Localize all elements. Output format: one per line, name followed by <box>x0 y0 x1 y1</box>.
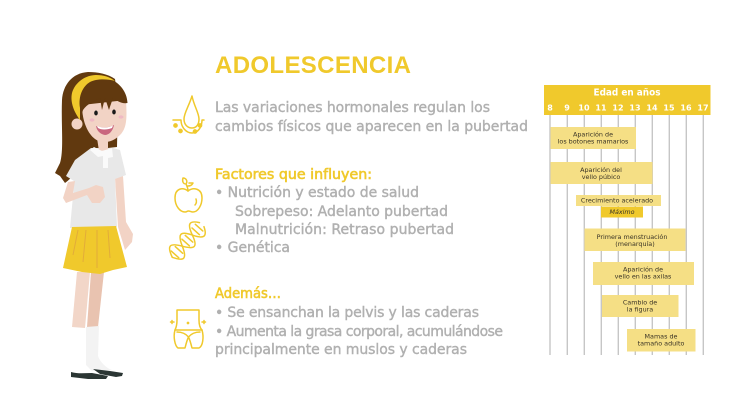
bar: armpit hair: Aparición de <box>623 266 663 274</box>
collar <box>90 147 113 168</box>
bar: growth spurt: Crecimiento acelerado <box>581 196 653 204</box>
right arm <box>115 176 133 250</box>
skirt <box>63 226 127 274</box>
skirt pleats <box>73 230 110 268</box>
title: ADOLESCENCIA <box>215 52 411 79</box>
list: factors: Sobrepeso: Adelanto pubertad <box>235 204 448 220</box>
bar: body shape: la figura <box>627 306 653 314</box>
list: additional changes: principalmente en muslos y caderas <box>215 342 467 358</box>
list: additional changes: • Se ensanchan la pelvis y las caderas <box>215 305 479 321</box>
list: additional changes: • Aumenta la grasa corporal, acumulándose <box>215 324 503 340</box>
chart header: 13 <box>629 104 641 112</box>
chart header: 12 <box>612 104 624 112</box>
left arm and hand <box>63 181 105 203</box>
bar: pubic hair: vello púbico <box>582 173 620 181</box>
chart header: 16 <box>680 104 692 112</box>
icon: hair follicle <box>173 96 204 133</box>
chart header: 14 <box>646 104 658 112</box>
eyes <box>94 110 116 116</box>
icon: DNA helix <box>165 218 209 264</box>
chart header: Edad en años <box>594 88 661 98</box>
text: hormonal variations: Las variaciones hormonales regulan los <box>215 100 490 116</box>
fringe <box>78 78 128 120</box>
sock <box>86 326 112 371</box>
cheeks <box>90 115 124 122</box>
neck <box>97 138 108 151</box>
bar: armpit hair <box>593 262 694 285</box>
bar: breast buds: Aparición de <box>573 130 613 138</box>
icon: waist and hips <box>170 310 206 348</box>
bar: body shape: Cambio de <box>623 298 657 306</box>
text: hormonal variations <box>215 100 528 135</box>
hair back <box>55 72 118 183</box>
chart header: 17 <box>697 104 709 112</box>
icon: apple <box>175 178 202 212</box>
ear <box>72 118 82 130</box>
list: factors <box>215 185 454 256</box>
headband <box>71 75 115 120</box>
bar: peak <box>601 206 643 218</box>
bar: breast buds: los botones mamarios <box>558 138 629 146</box>
legs <box>72 272 104 328</box>
bar: adult breast size: tamaño adulto <box>638 340 684 348</box>
heading: furthermore: Además… <box>215 286 281 302</box>
chart header: 11 <box>595 104 607 112</box>
bar: first menstruation <box>584 228 686 251</box>
bar: armpit hair: vello en las axilas <box>615 272 672 280</box>
chart header: 15 <box>663 104 675 112</box>
bar: growth spurt <box>576 195 661 206</box>
bar: adult breast size <box>627 329 696 352</box>
teeth <box>97 126 113 130</box>
chart header <box>544 85 710 115</box>
shoes <box>71 369 123 379</box>
text: hormonal variations: cambios físicos que aparecen en la pubertad <box>215 119 528 135</box>
bar: breast buds <box>550 127 636 149</box>
chart grid lines <box>550 115 703 355</box>
list: factors: Malnutrición: Retraso pubertad <box>235 222 454 238</box>
mouth <box>96 125 114 135</box>
bar: body shape <box>602 295 678 317</box>
chart header: 10 <box>578 104 590 112</box>
shirt <box>66 148 126 228</box>
bar: first menstruation: (menarquía) <box>615 240 655 248</box>
bar: first menstruation: Primera menstruación <box>597 233 667 241</box>
chart header: 8 <box>547 104 553 112</box>
bar: adult breast size: Mamas de <box>645 332 678 340</box>
chart header: 9 <box>564 104 570 112</box>
illustration: teenage girl <box>55 72 133 379</box>
heading: influencing factors: Factores que influyen: <box>215 167 372 183</box>
face <box>82 100 126 142</box>
bar: pubic hair <box>550 162 652 184</box>
list: additional changes <box>215 305 503 358</box>
bar: peak: Máximo <box>609 208 635 216</box>
list: factors: • Genética <box>215 240 290 256</box>
chart: age timeline <box>544 85 710 355</box>
list: factors: • Nutrición y estado de salud <box>215 185 419 201</box>
bar: pubic hair: Aparición del <box>580 166 622 174</box>
